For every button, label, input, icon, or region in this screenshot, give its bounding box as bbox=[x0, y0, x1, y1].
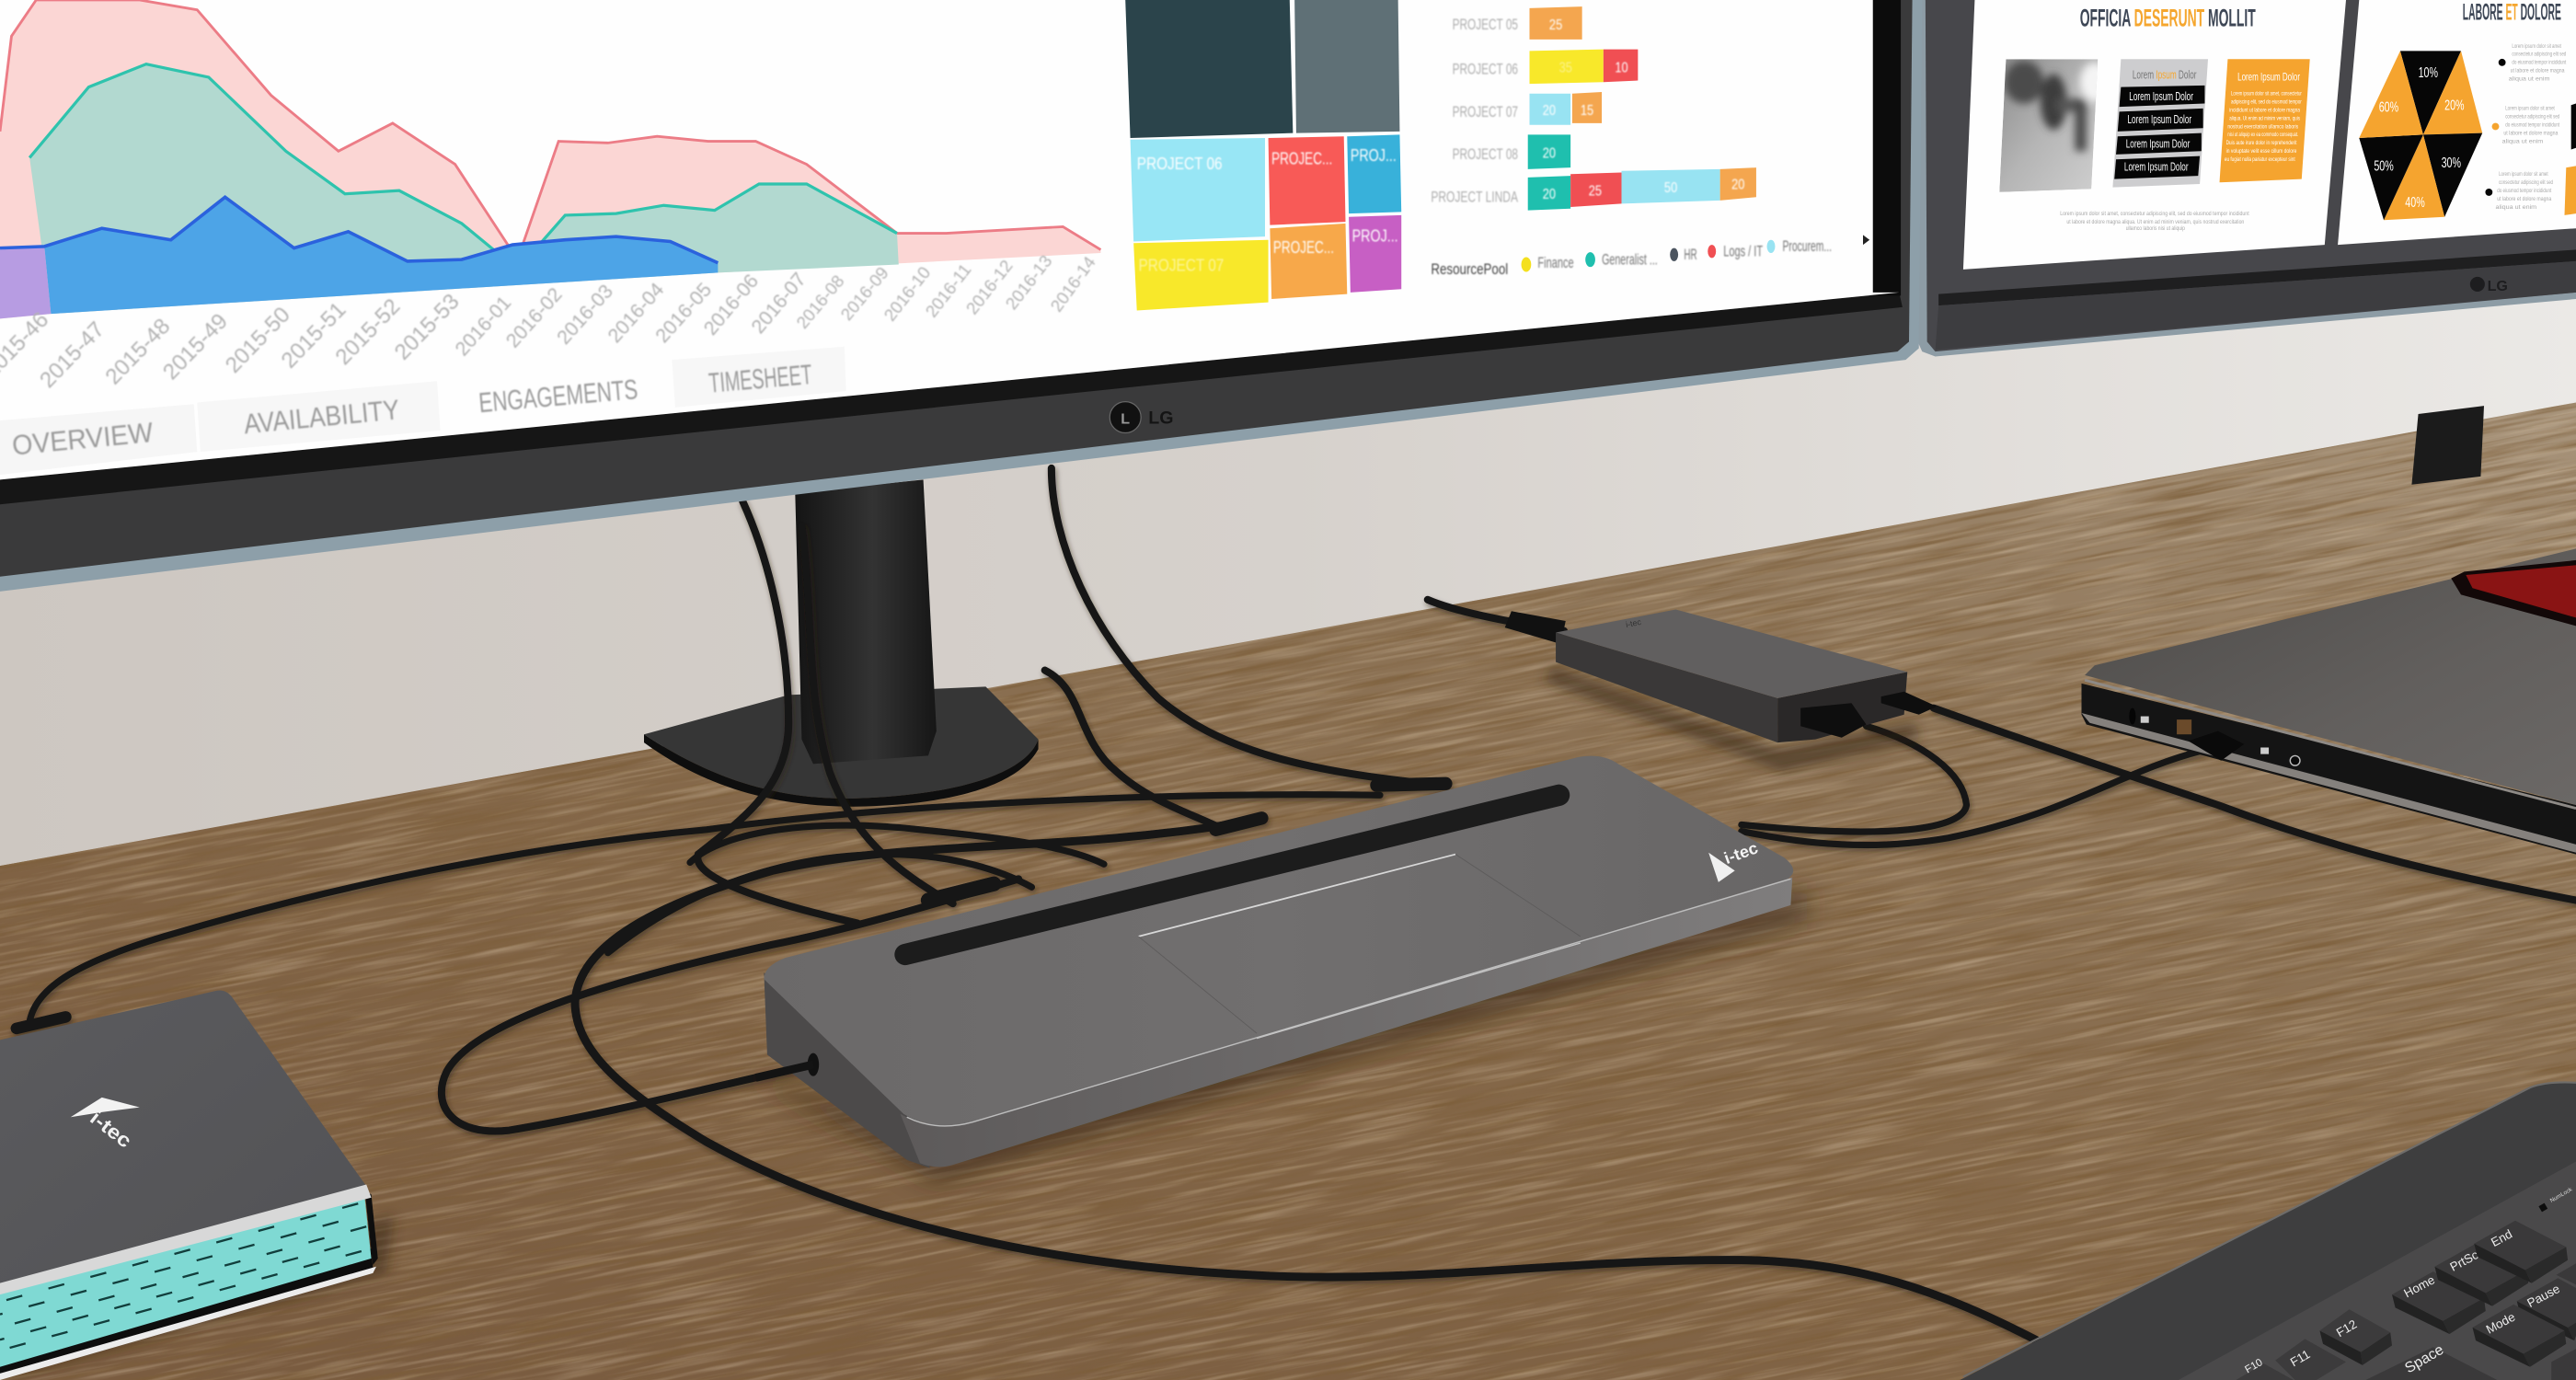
blue series bbox=[44, 197, 718, 314]
slide orange panel: Duis aute irure dolor in reprehenderit bbox=[2226, 140, 2297, 146]
key: Pause bbox=[2517, 1278, 2576, 1340]
axis labels: 2016-02 bbox=[501, 283, 567, 352]
charger USB plug two bbox=[1881, 692, 1937, 715]
axis labels: 2016-07 bbox=[747, 269, 811, 338]
axis labels: 2016-12 bbox=[962, 256, 1017, 318]
bullet points bbox=[2485, 44, 2567, 211]
laptop ports bbox=[2129, 708, 2300, 765]
bullet points: aliqua ut enim bbox=[2502, 139, 2543, 144]
slide orange panel: incididunt ut labore et dolore magna bbox=[2229, 107, 2300, 113]
left monitor black strip bbox=[0, 293, 1903, 504]
teal panel bbox=[0, 1198, 372, 1367]
wall bbox=[0, 0, 2576, 887]
treemap: PROJ... bbox=[1352, 225, 1398, 245]
dock top bbox=[764, 756, 1793, 1126]
stacked bar chart: 35 bbox=[1559, 60, 1572, 76]
monitor right bbox=[1914, 0, 2576, 357]
slide orange panel: eu fugiat nulla pariatur excepteur sint bbox=[2225, 156, 2295, 163]
cable: charger to outside bbox=[1934, 708, 2576, 901]
silver top strip bbox=[0, 1185, 372, 1294]
docking station bbox=[740, 756, 1807, 1183]
i-tec logo hard drive: i-tec bbox=[86, 1107, 136, 1153]
slide caption: ullamco laboris nisi ut aliquip bbox=[2126, 225, 2185, 232]
left monitor bezel bbox=[0, 0, 1913, 577]
purple overlap bbox=[0, 247, 51, 318]
axis labels: 2016-13 bbox=[1002, 251, 1056, 313]
keyboard bbox=[1960, 1082, 2576, 1380]
hexagon chart: 10% bbox=[2419, 64, 2438, 81]
cable: hard drive bbox=[29, 795, 1380, 1022]
axis labels: 2016-03 bbox=[553, 281, 617, 349]
external hard drive bbox=[0, 991, 395, 1380]
key: Space bbox=[2365, 1341, 2497, 1380]
chart legend: Generalist ... bbox=[1602, 251, 1658, 269]
slide caption bbox=[2060, 211, 2249, 232]
axis labels: 2015-53 bbox=[390, 289, 465, 365]
dock slot bbox=[905, 795, 1559, 955]
chart legend bbox=[1431, 235, 1869, 278]
dock front slit bbox=[1257, 943, 1581, 1039]
key: Pause: Pause bbox=[2524, 1282, 2562, 1310]
axis labels: 2015-50 bbox=[221, 303, 295, 378]
axis labels: 2015-47 bbox=[35, 317, 109, 393]
axis labels: 2016-08 bbox=[792, 271, 848, 332]
plug: hard drive bbox=[17, 1017, 65, 1029]
bullet points: Lorem ipsum dolor sit amet bbox=[2499, 172, 2548, 178]
panel tabs: TIMESHEET bbox=[707, 360, 813, 399]
axis labels: 2015-51 bbox=[277, 297, 351, 374]
cable: laptop to dock bbox=[1742, 751, 2202, 845]
stacked bar chart: 20 bbox=[1731, 176, 1744, 192]
laptop bbox=[2081, 548, 2576, 855]
axis labels: 2016-11 bbox=[922, 260, 975, 321]
chart legend: ResourcePool bbox=[1431, 260, 1508, 278]
panel tabs bbox=[0, 347, 846, 475]
slide orange panel: in voluptate velit esse cillum dolore bbox=[2226, 148, 2297, 155]
plug: dock rear left bbox=[928, 884, 994, 901]
slide list panel: Lorem Ipsum Dolor bbox=[2124, 161, 2189, 174]
dashboard screen bbox=[0, 0, 1899, 479]
cable: second loop bbox=[608, 855, 1031, 953]
hexagon chart bbox=[2359, 51, 2482, 220]
right monitor housing bbox=[1914, 0, 2576, 357]
slide orange panel: aliqua. Ut enim ad minim veniam, quis bbox=[2229, 115, 2300, 121]
panel tabs: AVAILABILITY bbox=[243, 395, 401, 440]
stacked bar chart: 20 bbox=[1543, 102, 1556, 119]
treemap: PROJEC... bbox=[1271, 149, 1332, 168]
right screen border bbox=[1873, 0, 1901, 295]
hexagon chart: 30% bbox=[2442, 155, 2461, 171]
slide caption: Lorem ipsum dolor sit amet, consectetur adipiscing elit, sed do eiusmod tempor incididunt bbox=[2060, 211, 2249, 217]
i-tec logo hard drive bbox=[71, 1098, 140, 1153]
cropped orange block bbox=[2565, 166, 2576, 215]
key: F11 bbox=[2275, 1339, 2346, 1380]
treemap bbox=[1125, 0, 1401, 311]
charger top bbox=[1556, 609, 1907, 698]
key: F11: F11 bbox=[2288, 1347, 2312, 1369]
charger USB plug one bbox=[1800, 703, 1867, 738]
dock cut line bbox=[1139, 855, 1455, 937]
right monitor bezel bbox=[1926, 0, 2576, 351]
LG logo left: L bbox=[1121, 411, 1130, 428]
key: lower right bbox=[2551, 1349, 2576, 1380]
num lock: NumLock bbox=[2549, 1186, 2574, 1204]
plug: dock rear right bbox=[1376, 784, 1445, 786]
axis labels: 2016-09 bbox=[837, 263, 892, 324]
axis labels bbox=[0, 251, 1099, 393]
cable: charger to dock bbox=[1742, 726, 1967, 832]
key: Home: Home bbox=[2401, 1272, 2437, 1300]
dock front bbox=[901, 878, 1792, 1167]
LG logo left bbox=[1110, 402, 1173, 433]
charger end bbox=[1777, 672, 1907, 742]
key: End: End bbox=[2489, 1227, 2514, 1249]
axis labels: 2015-49 bbox=[158, 309, 233, 385]
grille black base bbox=[0, 1248, 373, 1376]
area chart bbox=[0, 0, 1100, 393]
axis labels: 2016-14 bbox=[1046, 253, 1099, 316]
bullet points: ut labore et dolore magna bbox=[2511, 69, 2565, 75]
stacked bar chart: PROJECT 08 bbox=[1453, 145, 1518, 163]
charger logo: i-tec bbox=[1625, 617, 1642, 629]
charger plug mains bbox=[1505, 611, 1566, 644]
smartphone bbox=[2451, 560, 2576, 626]
chart legend: Procurem... bbox=[1783, 237, 1832, 255]
stacked bar chart: 20 bbox=[1543, 144, 1556, 161]
key: F12: F12 bbox=[2334, 1317, 2359, 1340]
cable: charger mains bbox=[1428, 600, 1564, 631]
power charger bbox=[1505, 609, 1937, 772]
hard drive shadow bbox=[0, 1215, 395, 1380]
charger shadow bbox=[1545, 665, 1922, 772]
bullet points: ut labore et dolore magna bbox=[2503, 131, 2559, 136]
laptop base bbox=[2081, 684, 2576, 855]
slide: Labore et Dolore bbox=[2338, 0, 2576, 245]
monitor stand bbox=[644, 479, 1039, 807]
cropped black block bbox=[2571, 103, 2576, 149]
black cube bbox=[2411, 406, 2484, 485]
stacked bar chart: 25 bbox=[1549, 17, 1562, 33]
stacked bar chart: 15 bbox=[1581, 102, 1593, 119]
keyboard rim bbox=[1963, 1082, 2576, 1376]
right monitor dark strip bbox=[1938, 249, 2576, 305]
charger side bbox=[1556, 633, 1777, 742]
right end bbox=[364, 1191, 378, 1265]
stacked bar chart: PROJECT 07 bbox=[1453, 103, 1518, 121]
key: F10 bbox=[2236, 1356, 2294, 1380]
wooden desk bbox=[0, 403, 2576, 1380]
laptop base silver edge bbox=[2081, 713, 2576, 853]
cable: loop bbox=[690, 825, 1104, 864]
laptop lid bbox=[2085, 548, 2576, 805]
slide orange panel: Lorem ipsum dolor sit amet, consectetur bbox=[2231, 91, 2302, 98]
dock port bbox=[755, 1053, 819, 1077]
key: F10: F10 bbox=[2243, 1356, 2265, 1375]
hexagon chart: 40% bbox=[2405, 194, 2425, 211]
stacked bar chart bbox=[1431, 6, 1756, 211]
key: Mode: Mode bbox=[2484, 1310, 2517, 1337]
dock front highlight bbox=[907, 879, 1790, 1126]
treemap: PROJECT 06 bbox=[1137, 154, 1223, 173]
slide orange panel: Lorem Ipsum Dolor bbox=[2237, 72, 2300, 84]
stacked bar chart: 10 bbox=[1615, 60, 1628, 76]
axis labels: 2016-04 bbox=[604, 279, 668, 347]
hexagon chart: 20% bbox=[2444, 98, 2465, 114]
cable: rear plug bbox=[1045, 671, 1224, 830]
hexagon chart: 50% bbox=[2374, 158, 2394, 175]
stacked bar chart: 20 bbox=[1543, 186, 1556, 202]
slide photo bbox=[1999, 59, 2110, 192]
slide list panel bbox=[2112, 59, 2208, 188]
bullet points: aliqua ut enim bbox=[2495, 205, 2536, 211]
bullet points: aliqua ut enim bbox=[2509, 76, 2549, 82]
LG logo right: LG bbox=[2488, 278, 2508, 294]
slide list panel: Lorem Ipsum Dolor bbox=[2133, 69, 2197, 82]
treemap: PROJ... bbox=[1351, 145, 1397, 165]
slide orange panel: nostrud exercitation ullamco laboris bbox=[2227, 123, 2299, 130]
i-tec logo dock bbox=[1708, 838, 1760, 882]
axis labels: 2016-10 bbox=[880, 263, 934, 325]
hexagon chart: 60% bbox=[2379, 98, 2398, 115]
chart legend: Finance bbox=[1537, 254, 1574, 271]
slide: Officia Deserunt Mollit bbox=[1963, 0, 2346, 270]
cable: monitor centre bbox=[801, 525, 953, 903]
cable: monitor right bbox=[1052, 468, 1445, 786]
bullet points: do eiusmod tempor incididunt bbox=[2497, 189, 2551, 194]
key: Space: Space bbox=[2402, 1341, 2446, 1376]
panel tabs: ENGAGEMENTS bbox=[477, 374, 639, 419]
left monitor housing edge bbox=[0, 0, 1922, 592]
slide orange panel: adipiscing elit, sed do eiusmod tempor bbox=[2231, 99, 2302, 106]
panel tabs: OVERVIEW bbox=[11, 418, 155, 462]
red series bbox=[0, 0, 1100, 318]
LG logo right bbox=[2470, 277, 2508, 294]
i-tec logo dock: i-tec bbox=[1721, 838, 1760, 868]
green series bbox=[29, 64, 899, 314]
laptop lid edge bbox=[2085, 680, 2576, 809]
chart legend: HR bbox=[1684, 246, 1697, 263]
slide orange panel bbox=[2219, 59, 2310, 182]
hard drive top bbox=[0, 991, 366, 1284]
stacked bar chart: 25 bbox=[1589, 183, 1602, 200]
treemap: PROJEC... bbox=[1273, 237, 1334, 257]
axis labels: 2016-01 bbox=[451, 292, 515, 360]
key: Mode bbox=[2473, 1305, 2566, 1367]
stacked bar chart: PROJECT LINDA bbox=[1431, 189, 1518, 206]
slide list panel: Lorem Ipsum Dolor bbox=[2126, 138, 2190, 151]
keyboard key deck bbox=[2179, 1161, 2576, 1380]
cable: dock power bbox=[442, 879, 1018, 1131]
teal panel slots bbox=[0, 1203, 366, 1351]
axis labels: 2015-52 bbox=[331, 294, 405, 370]
laptop USB plug bbox=[2189, 731, 2244, 761]
slide caption: ut labore et dolore magna aliqua. Ut enim ad minim veniam, quis nostrud exercitation bbox=[2066, 219, 2245, 225]
bullet points: Lorem ipsum dolor sit amet bbox=[2505, 107, 2555, 112]
bullet points: consectetur adipiscing elit sed bbox=[2499, 180, 2553, 186]
key: PrtSc bbox=[2434, 1244, 2528, 1306]
cables bbox=[17, 468, 2576, 1340]
axis labels: 2015-48 bbox=[101, 314, 175, 389]
dock left end bbox=[764, 972, 930, 1168]
slide title: OFFICIA DESERUNT MOLLIT bbox=[2080, 5, 2256, 32]
stacked bar chart: PROJECT 06 bbox=[1453, 60, 1518, 77]
bullet points: ut labore et dolore magna bbox=[2497, 197, 2552, 202]
plug: dock rear middle bbox=[1215, 818, 1261, 830]
tab backgrounds bbox=[0, 404, 197, 475]
stacked bar chart: 50 bbox=[1664, 179, 1677, 196]
key: F12 bbox=[2319, 1309, 2392, 1365]
LG logo left: LG bbox=[1148, 408, 1173, 429]
right monitor lower bezel bbox=[1936, 261, 2576, 350]
axis labels: 2016-05 bbox=[651, 279, 716, 347]
slide list panel: Lorem Ipsum Dolor bbox=[2127, 113, 2191, 126]
stacked bar chart: PROJECT 05 bbox=[1453, 16, 1518, 33]
treemap: PROJECT 07 bbox=[1139, 256, 1224, 275]
keyboard body bbox=[1960, 1082, 2576, 1380]
dock shadow bbox=[740, 887, 1807, 1183]
slide orange panel: nisi ut aliquip ex ea commodo consequat. bbox=[2227, 132, 2298, 138]
key: upper right bbox=[2557, 1263, 2576, 1284]
silver bottom strip bbox=[0, 1267, 376, 1380]
slide list panel: Lorem Ipsum Dolor bbox=[2129, 90, 2193, 103]
axis labels: 2016-06 bbox=[699, 270, 763, 339]
monitor left bbox=[0, 0, 1922, 592]
key: PrtSc: PrtSc bbox=[2447, 1248, 2481, 1274]
key: Home bbox=[2392, 1271, 2486, 1334]
dock panel seams bbox=[1139, 855, 1581, 1033]
num lock bbox=[2538, 1186, 2574, 1212]
key: End bbox=[2474, 1221, 2568, 1283]
chart legend: Logs / IT bbox=[1723, 243, 1763, 260]
cable: long keyboard bbox=[575, 822, 2037, 1340]
cable: monitor front left bbox=[697, 501, 857, 924]
